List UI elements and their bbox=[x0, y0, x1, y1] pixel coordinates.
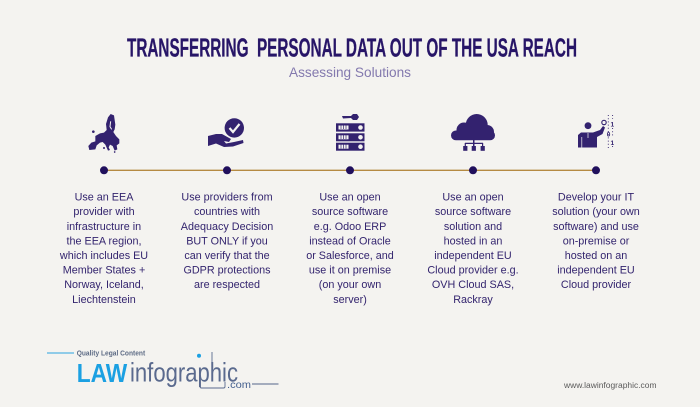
text block: own IT solution: software) and use bbox=[553, 221, 639, 233]
text block: adequacy decision: BUT ONLY if you bbox=[186, 235, 268, 247]
icon: developer with binary digits bbox=[578, 115, 614, 148]
icon: hand holding check bbox=[208, 118, 244, 147]
text block: EEA provider: infrastructure in bbox=[67, 221, 141, 233]
text block: open source EU cloud: source software bbox=[435, 206, 511, 218]
text block: EEA provider: Norway, Iceland, bbox=[64, 279, 144, 291]
icon: developer with binary digits: 1 bbox=[610, 122, 614, 128]
text block: adequacy decision: GDPR protections bbox=[183, 265, 271, 277]
text block: own IT solution: Cloud provider bbox=[561, 279, 632, 291]
text block: open source on premise: instead of Oracle bbox=[309, 235, 391, 247]
text block: adequacy decision: Use providers from bbox=[181, 192, 273, 204]
logo: Law Infographic: infographic bbox=[130, 358, 238, 388]
icon: developer with binary digits: 0 bbox=[607, 132, 611, 138]
text block: own IT solution: solution (your own bbox=[552, 206, 640, 218]
text block: EEA provider: which includes EU bbox=[59, 250, 148, 262]
text block: own IT solution bbox=[552, 192, 640, 291]
text block: open source on premise: source software bbox=[312, 206, 388, 218]
text block: adequacy decision: Adequacy Decision bbox=[181, 221, 273, 233]
text block: EEA provider: the EEA region, bbox=[66, 235, 142, 247]
text block: EEA provider: provider with bbox=[73, 206, 135, 218]
logo: Law Infographic: .com bbox=[227, 380, 251, 391]
text block: open source on premise: use it on premise bbox=[309, 265, 391, 277]
logo: Law Infographic: Quality Legal Content bbox=[77, 350, 146, 358]
text block: open source on premise bbox=[306, 192, 394, 306]
text block: open source EU cloud: hosted in an bbox=[444, 235, 502, 247]
text block: adequacy decision bbox=[181, 192, 273, 291]
text block: EEA provider bbox=[59, 192, 148, 306]
text block: open source EU cloud: Rackray bbox=[453, 294, 493, 306]
text block: open source EU cloud: Cloud provider e.g. bbox=[427, 265, 519, 277]
icon: EU map bbox=[88, 114, 119, 153]
text block: open source EU cloud: OVH Cloud SAS, bbox=[432, 279, 514, 291]
text block: adequacy decision: countries with bbox=[194, 206, 260, 218]
logo: Law Infographic bbox=[47, 350, 278, 391]
text block: own IT solution: hosted on an bbox=[565, 250, 627, 262]
text block: adequacy decision: can verify that the bbox=[184, 250, 270, 262]
text block: open source EU cloud: solution and bbox=[444, 221, 502, 233]
text block: adequacy decision: are respected bbox=[194, 279, 260, 291]
logo: Law Infographic: LAW bbox=[77, 358, 128, 388]
text block: own IT solution: Develop your IT bbox=[558, 192, 635, 204]
text block: open source EU cloud bbox=[427, 192, 519, 306]
text block: EEA provider: Liechtenstein bbox=[72, 294, 136, 306]
text block: open source on premise: Use an open bbox=[319, 192, 381, 204]
text block: open source EU cloud: independent EU bbox=[434, 250, 512, 262]
icon: cloud network bbox=[451, 114, 495, 151]
text block: open source on premise: server) bbox=[333, 294, 367, 306]
text block: EEA provider: Use an EEA bbox=[75, 192, 134, 204]
text block: open source EU cloud: Use an open bbox=[442, 192, 504, 204]
icon: server with key bbox=[336, 114, 364, 151]
subtitle: Assessing Solutions bbox=[289, 65, 411, 80]
website url: www.lawinfographic.com bbox=[563, 380, 656, 390]
text block: own IT solution: on-premise or bbox=[563, 235, 630, 247]
text block: own IT solution: independent EU bbox=[557, 265, 635, 277]
text block: open source on premise: or Salesforce, and bbox=[306, 250, 394, 262]
text block: open source on premise: e.g. Odoo ERP bbox=[314, 221, 386, 233]
text block: open source on premise: (on your own bbox=[319, 279, 381, 291]
timeline bbox=[100, 166, 600, 174]
text block: EEA provider: Member States + bbox=[63, 265, 145, 277]
icon: developer with binary digits: 1 bbox=[610, 140, 614, 147]
